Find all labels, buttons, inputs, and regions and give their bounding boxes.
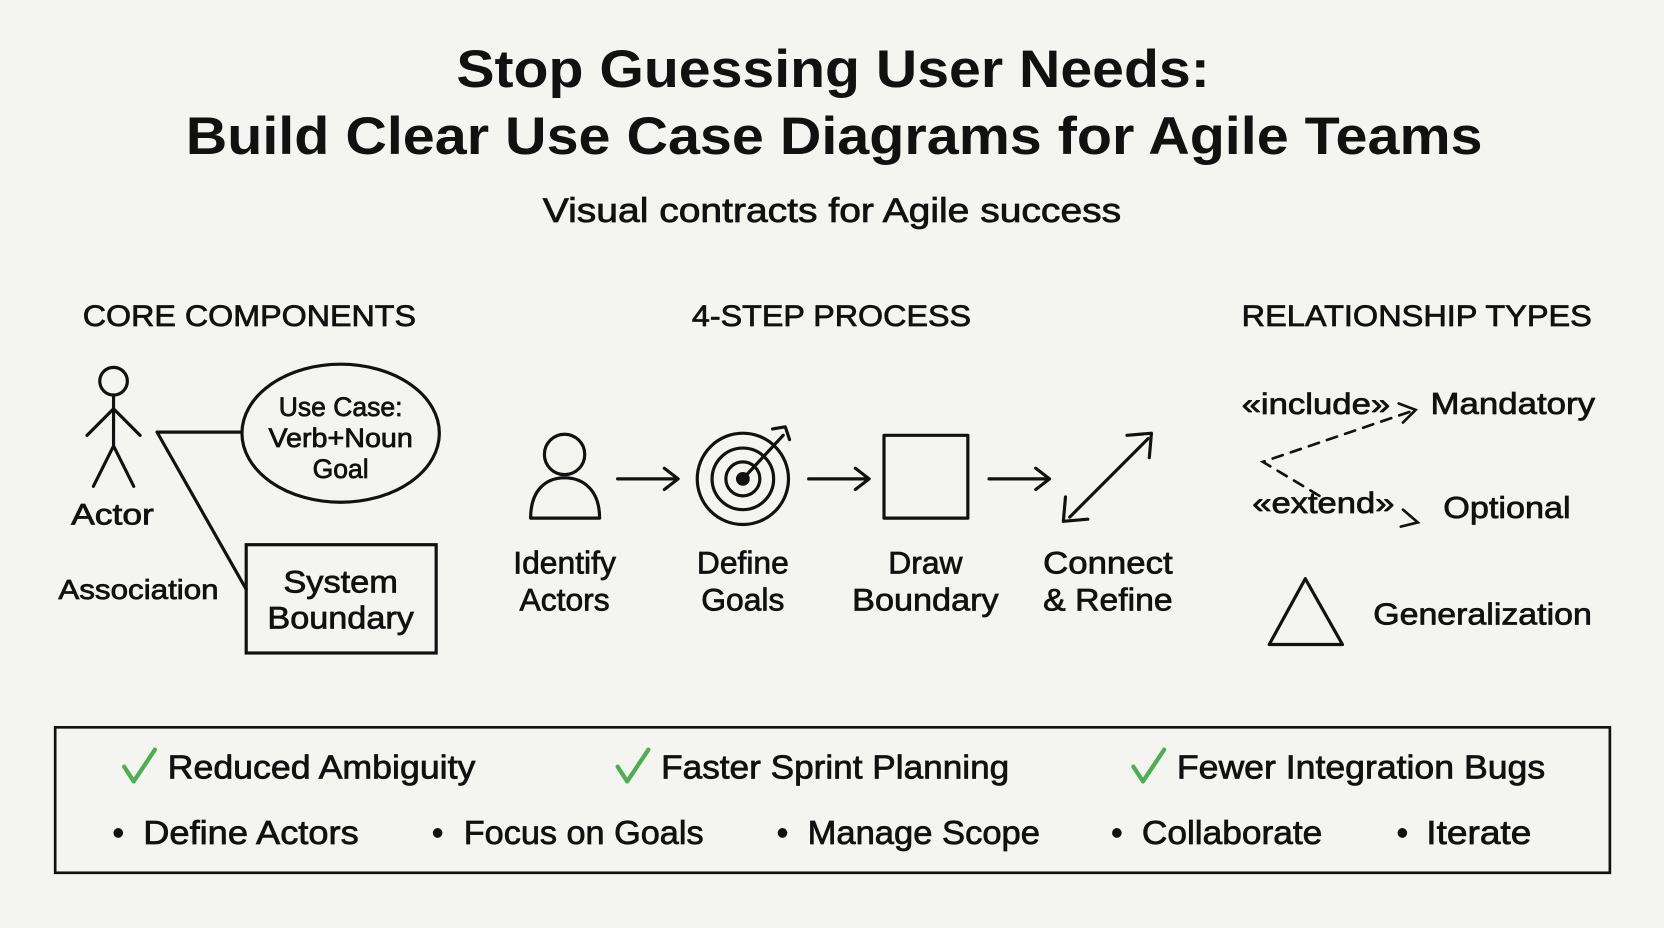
- panel: relationship types: [1242, 386, 1596, 645]
- actor label: Actor: [71, 499, 154, 532]
- use case text: Verb+Noun: [268, 423, 413, 453]
- heading: core components: CORE COMPONENTS: [83, 300, 416, 333]
- association label: Association: [58, 574, 219, 605]
- title: [186, 40, 1483, 166]
- heading: relationship types: RELATIONSHIP TYPES: [1242, 300, 1592, 333]
- step labels: Define: [697, 544, 789, 580]
- association lines: [157, 432, 246, 589]
- panel: core components: [87, 364, 439, 653]
- benefits box: Fewer Integration Bugs: [1177, 748, 1545, 785]
- step labels: Goals: [701, 582, 784, 618]
- benefits box: •: [112, 814, 124, 851]
- use case text: Use Case:: [279, 392, 403, 422]
- use case text: Goal: [313, 454, 369, 484]
- benefits box: Manage Scope: [808, 814, 1040, 851]
- step labels: Connect: [1043, 544, 1173, 580]
- checks: [124, 750, 1164, 781]
- benefits box: [55, 727, 1610, 873]
- dashed connectors: [1263, 403, 1418, 527]
- subtitle: Visual contracts for Agile success: [543, 192, 1121, 230]
- extend label: «extend»: [1252, 487, 1394, 520]
- icon: boundary square: [884, 435, 968, 518]
- step labels: Draw: [888, 544, 964, 580]
- system boundary box: [246, 545, 436, 653]
- icon: person: [531, 434, 600, 518]
- step labels: Actors: [519, 582, 610, 618]
- system boundary text: System: [283, 563, 398, 599]
- icon: target: [697, 427, 790, 525]
- system boundary text: [267, 563, 414, 636]
- arrow: [809, 468, 869, 489]
- benefits box: Reduced Ambiguity: [168, 748, 476, 785]
- arrow: [618, 468, 678, 489]
- step labels: & Refine: [1043, 582, 1173, 618]
- title: Stop Guessing User Needs:: [456, 40, 1210, 99]
- step labels: Boundary: [852, 582, 999, 618]
- include label: «include»: [1242, 388, 1390, 421]
- use case ellipse: [242, 364, 439, 502]
- benefits box: Faster Sprint Planning: [661, 748, 1009, 785]
- benefits box: Focus on Goals: [464, 814, 704, 851]
- benefits box: •: [432, 814, 443, 851]
- icon: generalization triangle: [1269, 579, 1342, 645]
- generalization: Generalization: [1373, 596, 1592, 631]
- use case text: [268, 392, 413, 484]
- optional: Optional: [1443, 490, 1571, 525]
- title: Build Clear Use Case Diagrams for Agile Teams: [186, 107, 1483, 166]
- panel: process icons: [531, 427, 1151, 525]
- benefits box: Collaborate: [1142, 814, 1322, 851]
- system boundary text: Boundary: [267, 600, 414, 636]
- benefits box: •: [1111, 814, 1123, 851]
- icon: actor: [87, 367, 140, 486]
- arrow: [989, 468, 1050, 489]
- step labels: [513, 544, 1173, 618]
- benefits box: •: [1397, 814, 1408, 851]
- benefits box: Define Actors: [143, 814, 359, 851]
- benefits box: •: [777, 814, 788, 851]
- mandatory: Mandatory: [1431, 386, 1596, 421]
- benefits box: Iterate: [1426, 814, 1531, 851]
- heading: 4-step process: 4-STEP PROCESS: [692, 300, 971, 333]
- step labels: Identify: [513, 544, 616, 580]
- icon: double arrow: [1063, 433, 1151, 521]
